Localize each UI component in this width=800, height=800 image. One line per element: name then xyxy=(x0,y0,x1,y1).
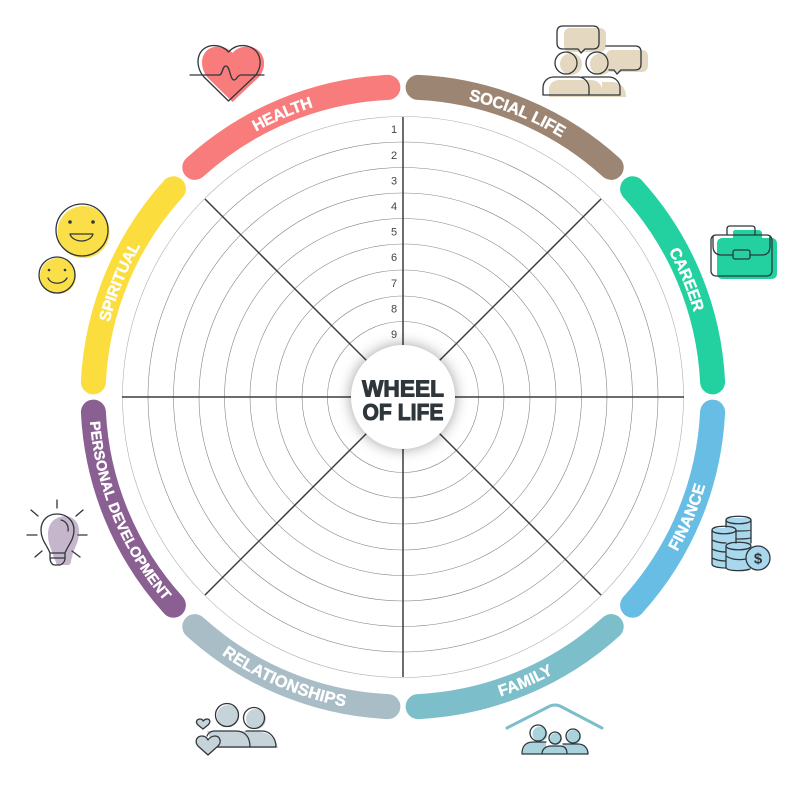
icon: coin stacks with dollar: $ xyxy=(754,550,763,568)
band: relationships: RELATIONSHIPS xyxy=(222,646,346,706)
band: finance xyxy=(620,400,726,618)
band: spiritual xyxy=(80,176,186,394)
center badge: wheel of life: WHEEL xyxy=(362,376,444,402)
band: family: FAMILY xyxy=(498,664,550,696)
wheel grid: rings and spokes xyxy=(122,116,684,678)
icon: family under roof xyxy=(507,705,602,754)
icon: couple with hearts xyxy=(196,704,278,755)
icon: briefcase xyxy=(711,226,777,279)
band: social life xyxy=(406,74,624,180)
scale numbers 1 to 9: 7 xyxy=(391,278,397,290)
icon: smiling faces xyxy=(39,204,110,294)
scale numbers 1 to 9: 8 xyxy=(391,304,397,316)
scale numbers 1 to 9: 2 xyxy=(391,150,397,162)
center badge: wheel of life: OF LIFE xyxy=(362,399,444,425)
icon: two people with speech bubbles xyxy=(543,26,648,97)
band: spiritual: SPIRITUAL xyxy=(100,245,140,322)
band: health: HEALTH xyxy=(252,96,312,132)
band: career xyxy=(620,176,726,394)
icon: light bulb xyxy=(27,500,87,565)
band: social life: SOCIAL LIFE xyxy=(469,90,566,138)
scale numbers 1 to 9: 3 xyxy=(391,176,397,188)
band: health xyxy=(182,74,400,180)
band: personal development xyxy=(80,400,186,618)
scale numbers 1 to 9: 4 xyxy=(391,201,397,213)
icon: coin stacks with dollar xyxy=(712,516,770,571)
scale numbers 1 to 9: 5 xyxy=(391,226,397,238)
band: relationships xyxy=(182,614,400,720)
band: personal development: PERSONAL DEVELOPMENT xyxy=(90,422,172,599)
scale numbers 1 to 9: 1 xyxy=(391,124,397,136)
scale numbers 1 to 9: 6 xyxy=(391,252,397,264)
band: finance: FINANCE xyxy=(668,483,706,552)
band: career: CAREER xyxy=(670,248,704,312)
center badge: wheel of life xyxy=(351,345,455,449)
scale numbers 1 to 9: 9 xyxy=(391,329,397,341)
band: family xyxy=(406,614,624,720)
scale numbers 1 to 9 xyxy=(391,124,397,341)
icon: heart with pulse xyxy=(190,46,264,102)
